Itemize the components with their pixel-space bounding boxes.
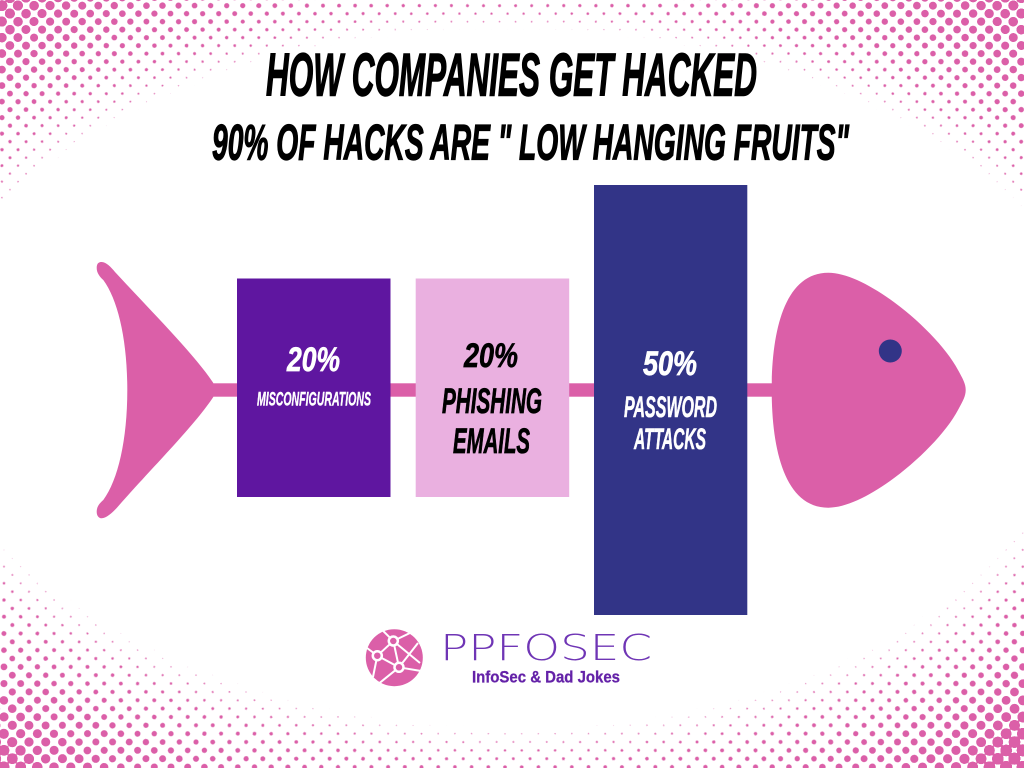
fish head — [772, 273, 966, 508]
panel: password attacks — [594, 185, 747, 615]
panel: phishing emails — [416, 278, 569, 497]
phishing label line 1: PHISHING — [442, 382, 542, 421]
panel: misconfigurations — [237, 278, 390, 497]
password label line 2: ATTACKS — [633, 423, 706, 456]
fish diagram — [97, 262, 966, 518]
password label line 1: PASSWORD — [624, 391, 717, 424]
misconfigurations label: MISCONFIGURATIONS — [257, 388, 371, 410]
phishing label line 2: EMAILS — [453, 422, 530, 461]
fish spine — [205, 383, 780, 397]
fish tail — [97, 262, 213, 518]
top halftone dots — [0, 0, 1024, 206]
phishing percentage: 20% — [463, 337, 518, 375]
logo — [366, 628, 652, 686]
logo tagline: InfoSec & Dad Jokes — [472, 668, 620, 686]
misconfigurations percentage: 20% — [286, 341, 340, 379]
fish eye — [879, 340, 902, 362]
logo wordmark: PPFOSEC — [440, 628, 652, 669]
icon: network globe — [366, 629, 423, 686]
bottom halftone dots — [0, 532, 1024, 768]
password percentage: 50% — [643, 345, 697, 383]
